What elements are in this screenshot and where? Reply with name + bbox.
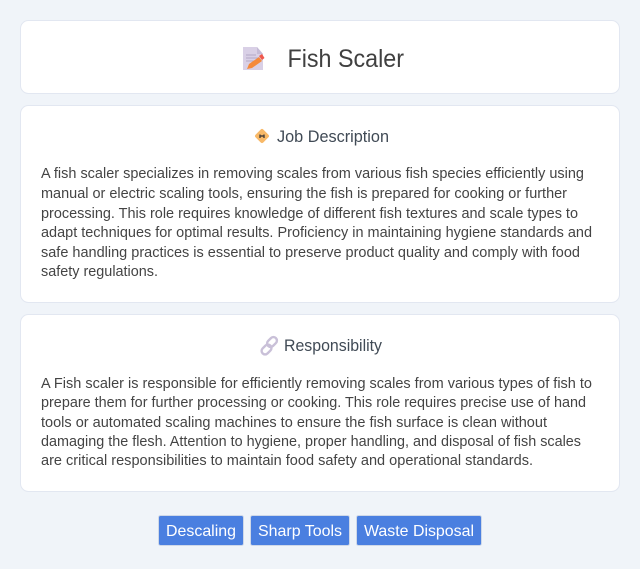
heading: responsibility: Responsibility: [284, 337, 383, 355]
text block: responsibility: are critical responsibilities to maintain food safety and operational standards.: [41, 453, 533, 469]
tags: [158, 516, 482, 546]
tag: Sharp Tools: Sharp Tools: [258, 523, 342, 540]
text block: responsibility: damaging the flesh. Attention to hygiene, proper handling, and disposal of fish scales: [41, 434, 581, 450]
text block: job description: A fish scaler specializes in removing scales from various fish species efficiently using: [41, 166, 584, 182]
text block: responsibility: prepare them for further processing or cooking. This role requires precise use of hand: [41, 395, 586, 411]
tag: Sharp Tools: [250, 516, 350, 546]
tag: Descaling: Descaling: [166, 523, 236, 540]
panel: responsibility: [20, 314, 620, 492]
text block: job description: manual or electric scaling tools, ensuring the fish is prepared for cooking or further: [41, 186, 567, 202]
tag: Descaling: [158, 516, 244, 546]
text block: responsibility: tools or automated scaling machines to ensure the fish surface is clean without: [41, 415, 547, 431]
heading: Fish Scaler: Fish Scaler: [288, 45, 404, 73]
panel: job description: [20, 106, 620, 302]
text block: responsibility: [41, 376, 592, 469]
heading: job description: Job Description: [277, 128, 389, 146]
icon: document with pencil: [243, 47, 264, 70]
text block: job description: safety regulations.: [41, 264, 158, 280]
text block: job description: adapt techniques for optimal results. Proficiency in maintaining hygiene standards and: [41, 225, 592, 241]
tag: Waste Disposal: Waste Disposal: [364, 523, 474, 540]
text block: job description: safe handling practices is essential to preserve product quality and comply with food: [41, 245, 580, 261]
icon: chain link: [260, 336, 278, 356]
text block: job description: processing. This role requires knowledge of different fish textures and scale types to: [41, 206, 578, 222]
panel: title: [20, 20, 620, 94]
text block: responsibility: A Fish scaler is responsible for efficiently removing scales from various types of fish to: [41, 376, 592, 392]
tag: Waste Disposal: [356, 516, 482, 546]
text block: job description: [41, 166, 592, 280]
icon: diamond sign: [254, 128, 270, 144]
